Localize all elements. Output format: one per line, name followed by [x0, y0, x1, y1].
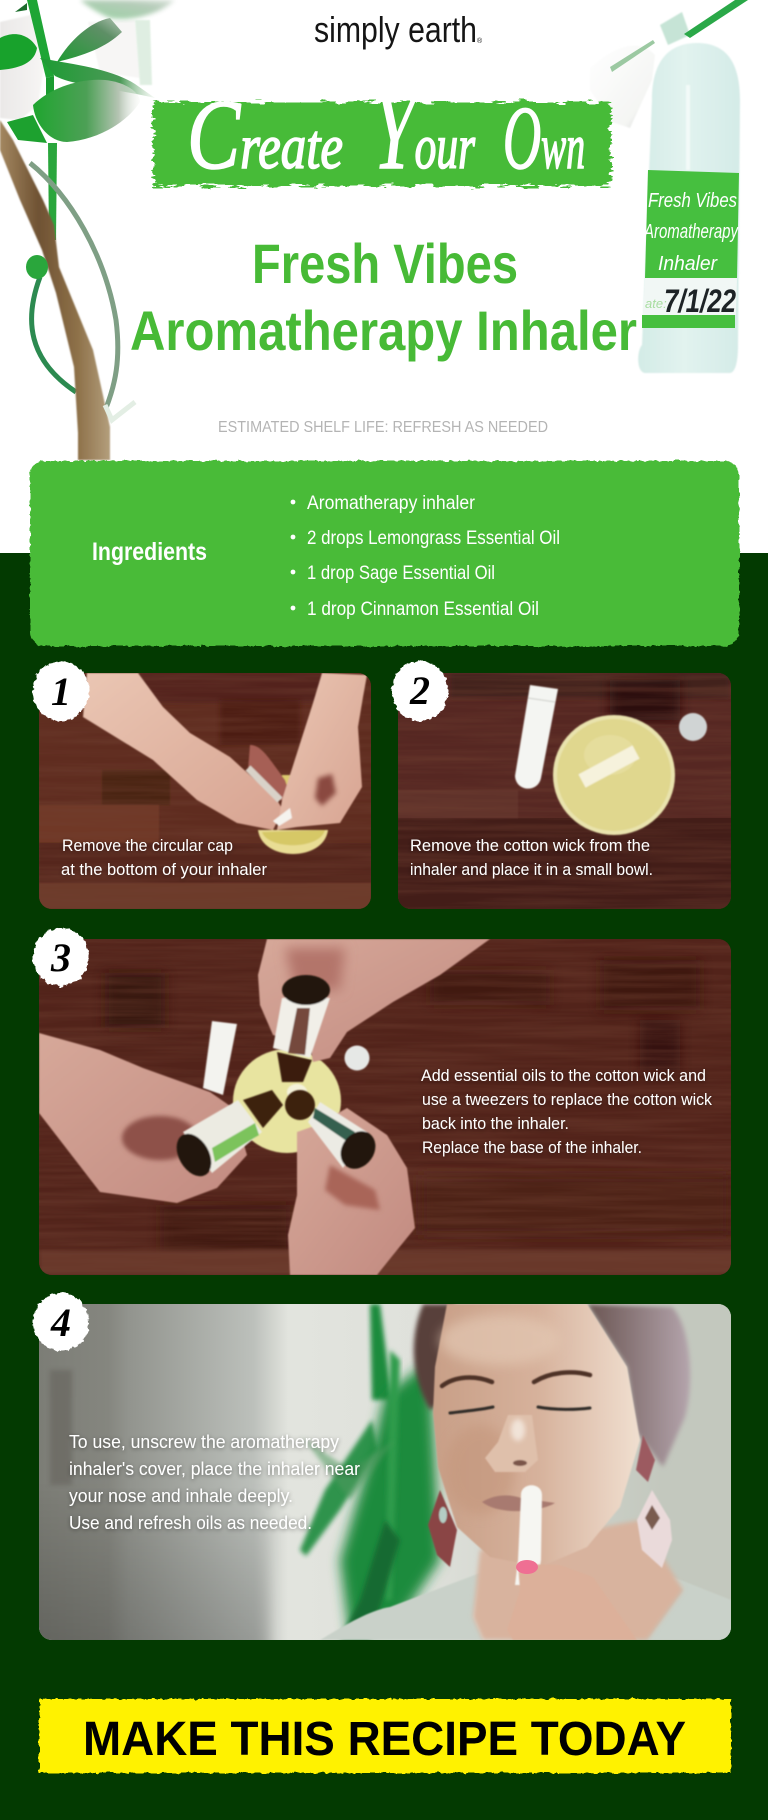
ingredients heading: Ingredients	[92, 538, 207, 566]
badge: step 4	[32, 1292, 90, 1352]
step 4 caption: Use and refresh oils as needed.	[69, 1513, 312, 1533]
panel: step 4 photo	[39, 1304, 731, 1640]
badge: step 3: 3	[50, 935, 71, 980]
ingredients list: 2 drops Lemongrass Essential Oil	[307, 528, 560, 549]
top bottle	[273, 975, 330, 1082]
bowl with wick	[553, 715, 675, 835]
hair	[414, 1304, 690, 1467]
inhaler product image	[638, 42, 740, 374]
badge: step 4: 4	[50, 1300, 71, 1345]
inhaler label: Inhaler	[658, 253, 718, 275]
brush stroke	[153, 102, 611, 186]
panel: step 2 photo	[398, 673, 731, 909]
hand	[507, 1564, 637, 1640]
shirt	[320, 1573, 731, 1640]
call to action banner	[38, 1697, 732, 1774]
panel: step 1 photo	[39, 673, 371, 909]
ingredients list: Aromatherapy inhaler	[307, 493, 476, 514]
step 4 caption: your nose and inhale deeply.	[69, 1486, 293, 1506]
step 2 caption	[410, 836, 653, 879]
badge: step 2	[390, 660, 449, 722]
eyebrows and eyes	[442, 1372, 590, 1413]
step 2 caption: inhaler and place it in a small bowl.	[410, 860, 653, 879]
cotton cap	[679, 713, 707, 741]
script heading: Own	[503, 89, 585, 188]
script heading	[187, 70, 585, 192]
call to action banner: MAKE THIS RECIPE TODAY	[83, 1713, 686, 1766]
earrings	[428, 1435, 672, 1568]
bowl	[233, 1049, 341, 1153]
lower right hand	[288, 1108, 415, 1275]
face	[433, 1304, 640, 1567]
step 1 caption: Remove the circular cap	[62, 836, 233, 855]
step 3 caption	[421, 1066, 712, 1157]
badge: step 1	[32, 661, 90, 722]
badge: step 2: 2	[409, 668, 430, 713]
step 3 caption: Add essential oils to the cotton wick and	[421, 1066, 706, 1085]
left hand	[39, 1033, 247, 1203]
inhaler tube	[515, 685, 558, 789]
plant	[300, 1304, 440, 1640]
right bottle	[285, 1090, 383, 1176]
lips	[482, 1495, 555, 1511]
step 4 caption	[68, 1432, 360, 1533]
top hand	[258, 939, 490, 1062]
hands	[83, 673, 367, 854]
badge: step 1: 1	[51, 669, 71, 714]
nose	[485, 1415, 538, 1472]
badge: step 3	[32, 928, 90, 988]
step 2 caption: Remove the cotton wick from the	[410, 836, 650, 855]
plant illustration: left	[0, 0, 174, 461]
step 3 caption: Replace the base of the inhaler.	[422, 1138, 642, 1157]
inhaler label: ate:	[645, 296, 667, 311]
panel: ingredients	[29, 460, 740, 648]
banner: Create Your Own	[150, 88, 614, 192]
neck	[473, 1520, 683, 1640]
inhaler at nose	[515, 1485, 542, 1585]
inhaler label	[642, 170, 739, 328]
white header background	[0, 0, 768, 553]
plant illustration: top right	[610, 0, 748, 128]
step 4 caption: To use, unscrew the aromatherapy	[69, 1432, 339, 1452]
cap	[344, 1046, 370, 1070]
main heading	[130, 232, 637, 362]
ingredients list	[291, 493, 560, 620]
step 4 caption: inhaler's cover, place the inhaler near	[69, 1459, 360, 1479]
step 3 caption: back into the inhaler.	[422, 1114, 569, 1133]
step 3 caption: use a tweezers to replace the cotton wick	[422, 1090, 712, 1109]
step 1 caption	[61, 836, 267, 879]
left bottle	[170, 1090, 283, 1182]
ingredients list: 1 drop Sage Essential Oil	[307, 563, 495, 584]
inhaler tube	[203, 1021, 237, 1095]
step 1 caption: at the bottom of your inhaler	[61, 860, 267, 879]
main heading: Fresh Vibes	[252, 232, 518, 295]
panel: step 3 photo	[39, 939, 731, 1275]
logo: ®	[477, 37, 483, 45]
ingredients list: 1 drop Cinnamon Essential Oil	[307, 599, 539, 620]
